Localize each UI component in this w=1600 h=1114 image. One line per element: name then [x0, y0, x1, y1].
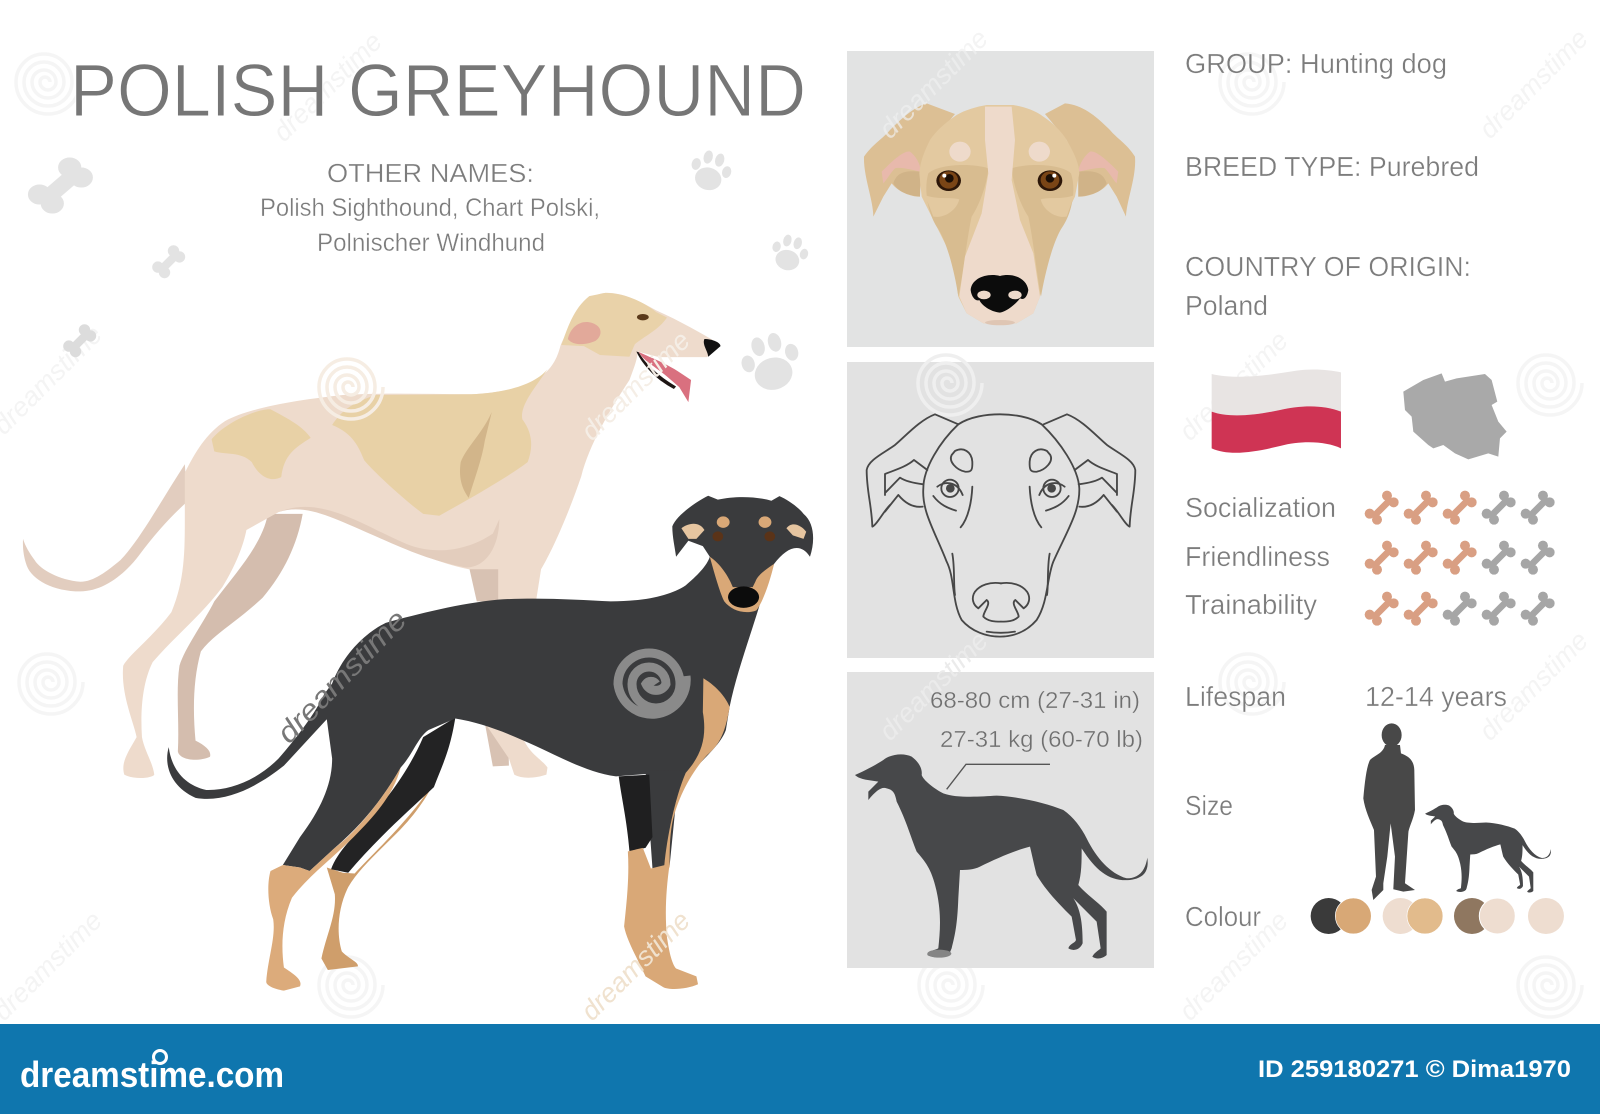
title: POLISH GREYHOUND — [70, 49, 806, 132]
decorative bones and paws — [31, 147, 812, 396]
right ear — [1045, 103, 1135, 217]
icon: Polish flag — [1212, 370, 1341, 453]
ear inner left — [681, 524, 704, 539]
cheeks — [925, 195, 1074, 217]
chest tan stripe — [664, 678, 730, 867]
colour swatches — [1185, 898, 1564, 934]
watermark on black dog: dreamstime — [271, 604, 414, 750]
panel: line-art head — [847, 355, 1154, 658]
lifespan: Lifespan — [1185, 681, 1286, 712]
watermark text on white background: dreamstime — [1473, 23, 1594, 144]
far front leg — [469, 566, 509, 766]
ear pink — [882, 152, 1118, 183]
far hind leg dark — [331, 717, 455, 873]
country of origin: COUNTRY OF ORIGIN: — [1185, 251, 1471, 282]
watermark spiral on panel — [918, 355, 982, 415]
lifespan: 12-14 years — [1365, 681, 1507, 712]
image id and author: ID 259180271 © Dima1970 — [1258, 1056, 1571, 1083]
nose — [971, 275, 1028, 313]
body and near legs — [123, 293, 719, 778]
other names text block: OTHER NAMES: — [327, 158, 534, 188]
group: GROUP: Hunting dog — [1185, 48, 1447, 79]
ratings: trainability: Trainability — [1185, 589, 1317, 620]
illustration: black and tan greyhound — [167, 496, 813, 991]
lifespan — [1185, 681, 1507, 712]
belly shading — [279, 507, 499, 567]
ear inner shading — [893, 171, 1107, 197]
panel watermark: dreamstime — [873, 23, 994, 144]
watermarks on cream dog — [319, 325, 696, 446]
eye left — [712, 531, 723, 541]
other names text block — [260, 158, 600, 257]
eyebrows — [717, 516, 730, 528]
far front leg dark — [619, 775, 652, 851]
height label: 68-80 cm (27-31 in) — [930, 687, 1140, 713]
panel: colored head portrait — [847, 23, 1154, 347]
eye right — [764, 531, 775, 541]
breed type: BREED TYPE: Purebred — [1185, 151, 1479, 182]
eyebrow spot right — [1029, 142, 1050, 162]
hind leg tan — [266, 767, 401, 991]
far hind leg tan — [321, 775, 438, 970]
chin — [985, 320, 1015, 325]
watermark on black dog — [271, 604, 696, 1026]
panel: height and weight silhouette — [847, 625, 1154, 968]
tail — [23, 464, 187, 591]
head tan area — [561, 293, 667, 357]
watermark text on white background: dreamstime — [1173, 905, 1294, 1026]
leader line — [947, 764, 1050, 789]
weight label: 27-31 kg (60-70 lb) — [940, 726, 1143, 752]
illustration: cream and tan greyhound — [23, 293, 721, 778]
near front lower leg — [485, 723, 547, 778]
ratings: trainability — [1185, 589, 1555, 626]
right eye — [1038, 170, 1062, 191]
dog silhouette — [855, 754, 1148, 958]
eye — [637, 314, 649, 320]
logo swirl — [154, 1050, 166, 1064]
front leg tan — [624, 848, 698, 989]
head — [919, 105, 1079, 323]
left eye — [936, 170, 961, 191]
watermarks on cream dog: dreamstime — [575, 325, 696, 446]
paw highlight — [927, 950, 951, 958]
watermark text on white background: dreamstime — [1173, 325, 1294, 446]
nose — [728, 586, 759, 608]
man silhouette — [1363, 723, 1415, 900]
ratings: socialization — [1185, 491, 1555, 525]
far hind leg — [178, 514, 303, 760]
other names text block: Polnischer Windhund — [317, 229, 545, 257]
other names text block: Polish Sighthound, Chart Polski, — [260, 194, 600, 222]
tan saddle patches — [212, 409, 311, 479]
breed info text — [1185, 48, 1479, 321]
left ear — [864, 103, 955, 217]
watermark text on white background: dreamstime — [1473, 625, 1594, 746]
head outline — [923, 414, 1079, 637]
watermark on black dog: dreamstime — [575, 905, 696, 1026]
muzzle tan — [710, 557, 774, 612]
left half features — [867, 414, 1001, 622]
small dog silhouette — [1425, 805, 1551, 893]
footer bar — [0, 1024, 1600, 1114]
body with tail and head — [167, 496, 813, 871]
ear — [568, 322, 601, 344]
nostrils — [977, 291, 1022, 299]
eyebrow spots — [949, 142, 971, 162]
icon: map of Poland — [1403, 373, 1507, 459]
right half features — [1001, 414, 1135, 622]
face shading — [926, 165, 1073, 297]
size comparison: Size — [1185, 790, 1233, 821]
near front leg dark gray — [646, 770, 694, 869]
colour swatches: Colour — [1185, 901, 1261, 932]
blaze — [959, 107, 1040, 323]
size comparison — [1185, 723, 1551, 900]
chin — [987, 632, 1015, 633]
ratings: friendliness — [1185, 541, 1555, 575]
nose — [704, 339, 721, 357]
ratings: socialization: Socialization — [1185, 492, 1336, 523]
panel watermark: dreamstime — [873, 625, 994, 746]
footer logo: dreamstime.com — [20, 1054, 284, 1095]
ear inner right — [786, 524, 806, 539]
watermark text on white background: dreamstime — [267, 26, 388, 147]
mouth and tongue — [639, 352, 691, 402]
eyebrow right — [759, 516, 771, 528]
ratings: friendliness: Friendliness — [1185, 541, 1330, 572]
country: Poland — [1185, 290, 1268, 321]
